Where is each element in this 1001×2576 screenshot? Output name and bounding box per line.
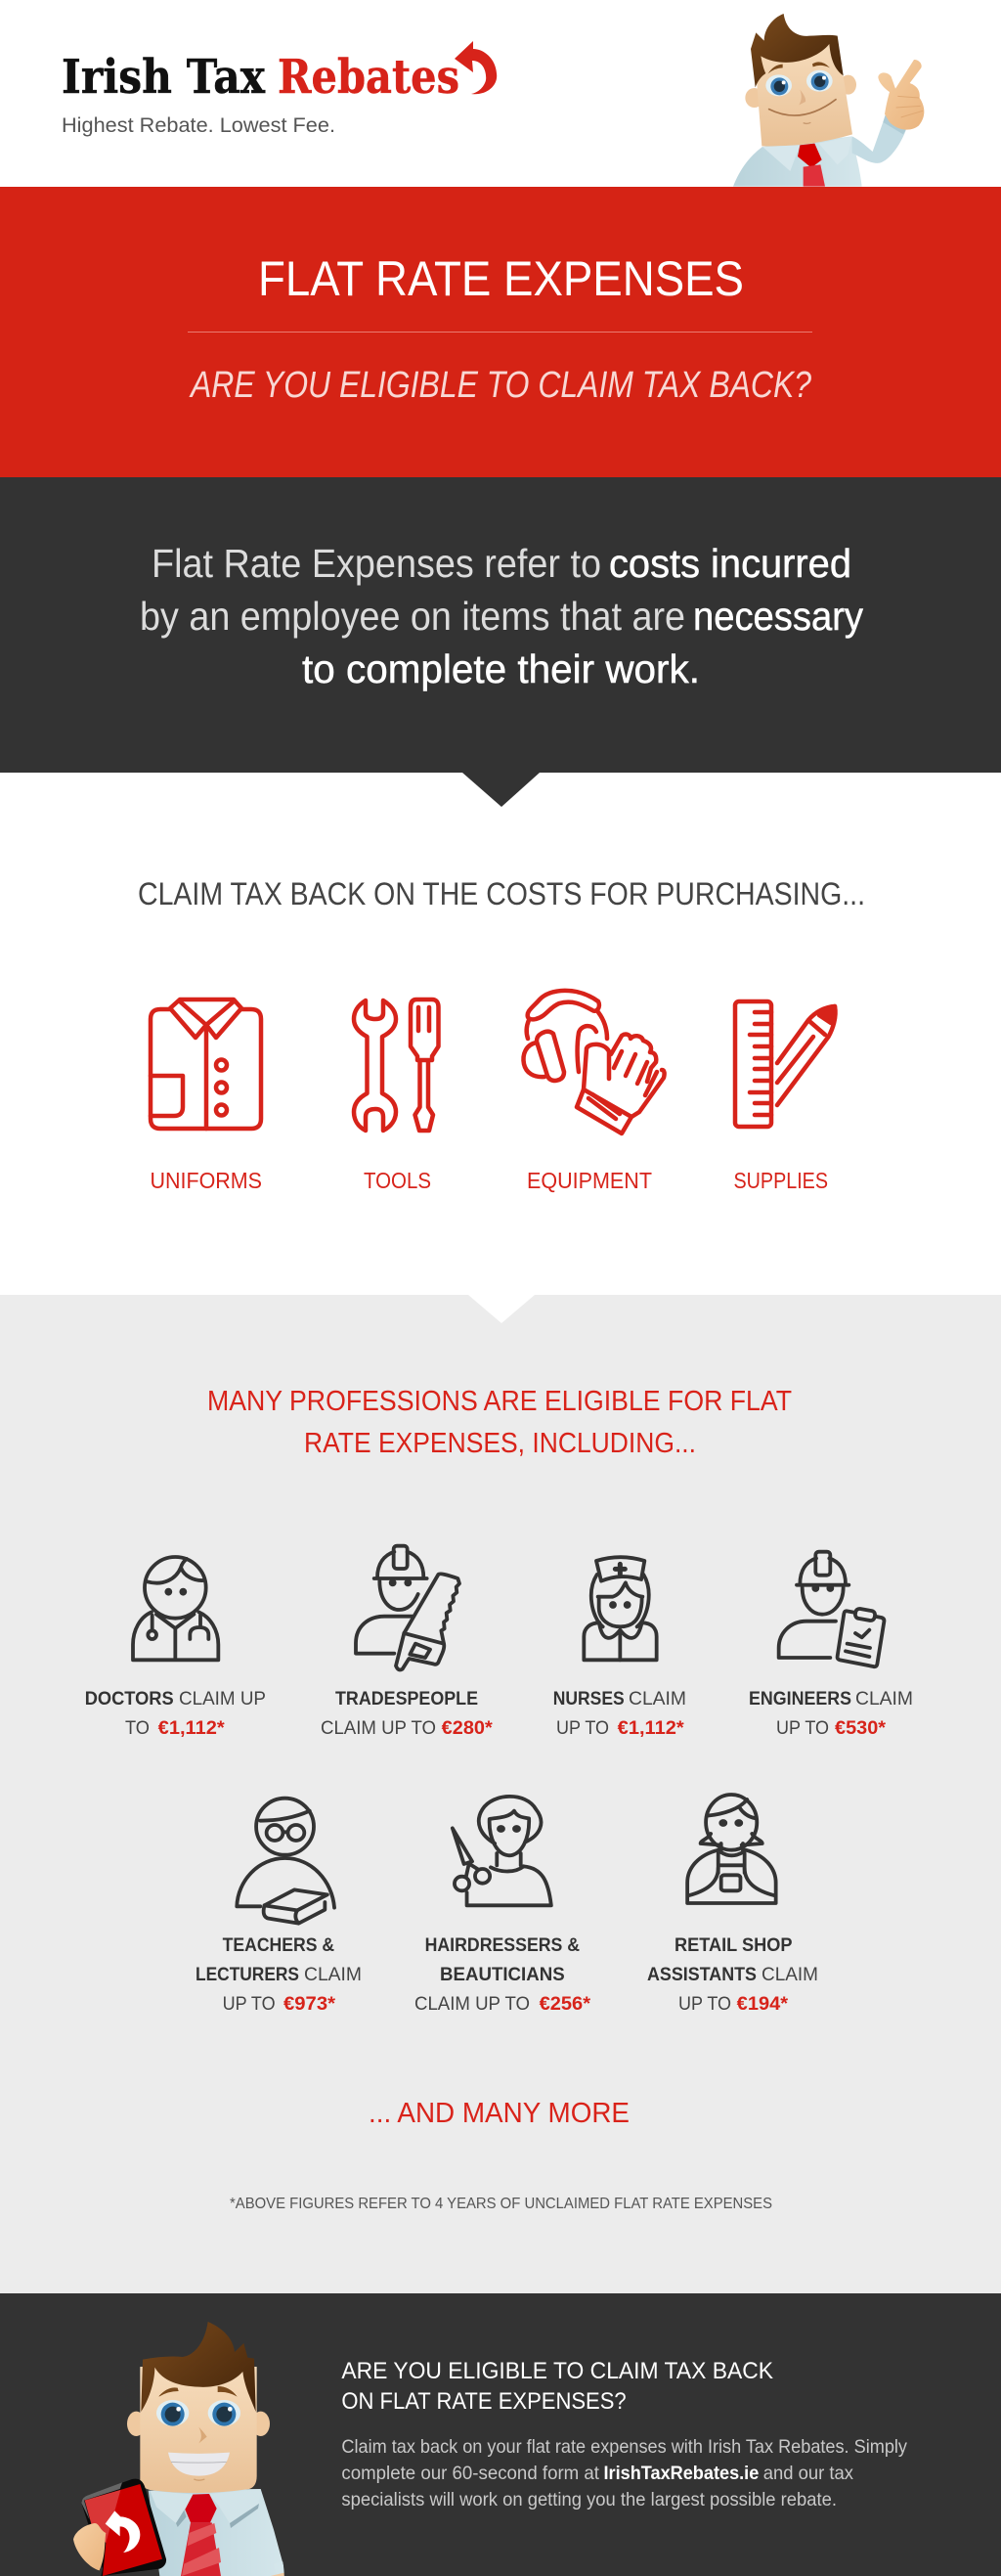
definition text [140,541,863,691]
panel: title banner [0,187,1001,477]
text: BEAUTICIANS [440,1964,565,1985]
footnote: *ABOVE FIGURES REFER TO 4 YEARS OF UNCLAIMED FLAT RATE EXPENSES [230,2196,772,2212]
tagline: Highest Rebate. Lowest Fee. [62,114,335,137]
character: pointing man [733,14,924,187]
heading [207,1386,792,1459]
text: CLAIM UP TO [321,1717,436,1739]
icon: ruler and pencil [735,1001,836,1127]
icon: engineer with clipboard [779,1552,884,1666]
profession: doctors [85,1557,266,1739]
text: CLAIM [304,1964,362,1985]
pointer arrow [462,773,540,807]
profession: nurses [553,1557,686,1739]
logo: Irish Tax [62,50,265,105]
profession: engineers [749,1552,913,1739]
heading: MANY PROFESSIONS ARE ELIGIBLE FOR FLAT [207,1386,792,1417]
heading: RATE EXPENSES, INCLUDING... [304,1428,696,1459]
icon: teacher with book [237,1799,334,1924]
text: TEACHERS & [223,1934,334,1956]
definition text: necessary [693,594,863,639]
text: €1,112* [158,1717,225,1739]
text: ENGINEERS [749,1688,851,1710]
pointer arrow [468,1295,535,1323]
label: uniforms: UNIFORMS [151,1168,262,1193]
icon: uniform shirt [151,999,261,1129]
text: CLAIM UP TO [414,1993,530,2015]
icon: wrench and screwdriver [354,999,438,1131]
text: €280* [442,1717,493,1739]
label: supplies: SUPPLIES [733,1168,828,1193]
text: DOCTORS [85,1688,174,1710]
footer body text: and our tax [763,2463,853,2484]
character: man holding phone [73,2322,284,2576]
text [647,1934,818,2015]
label: tools: TOOLS [364,1168,431,1193]
text: UP TO [776,1717,829,1739]
footer body text: Claim tax back on your flat rate expenses with Irish Tax Rebates. Simply [341,2436,907,2458]
text: UP TO [223,1993,276,2015]
text [85,1688,266,1739]
panel: header [0,0,1001,187]
text: €256* [540,1993,590,2015]
footer body text: complete our 60-second form at [341,2463,600,2484]
text [749,1688,913,1739]
text: NURSES [553,1688,625,1710]
text: CLAIM [762,1964,818,1985]
text [414,1934,590,2015]
text: UP TO [678,1993,731,2015]
icon: tradesperson with saw [356,1546,459,1669]
panel: professions [0,1295,1001,2293]
icon: nurse [584,1557,657,1660]
text [196,1934,362,2015]
heading: CLAIM TAX BACK ON THE COSTS FOR PURCHASING... [138,876,865,911]
text: CLAIM [629,1688,686,1710]
profession: retail shop assistants [647,1795,818,2015]
text [553,1688,686,1739]
panel: purchases [0,807,1001,1295]
icon: hairdresser with scissors [453,1797,551,1905]
icon: doctor [133,1557,218,1660]
profession: hairdressers and beauticians [414,1797,590,2015]
footer body text [341,2436,907,2510]
logo [62,41,497,105]
footer body text: specialists will work on getting you the largest possible rebate. [341,2489,837,2510]
text: RETAIL SHOP [675,1934,792,1956]
definition text: costs incurred [609,541,851,586]
text: CLAIM UP [179,1688,266,1710]
text: €973* [283,1993,335,2015]
icon: shop assistant [687,1795,776,1903]
footer heading [341,2358,773,2415]
text: UP TO [556,1717,609,1739]
logo: Rebates [278,50,459,105]
text: LECTURERS [196,1964,299,1985]
label: equipment: EQUIPMENT [527,1168,652,1193]
text: TO [125,1717,150,1739]
panel: definition [0,477,1001,807]
definition text: by an employee on items that are [140,594,685,639]
title: FLAT RATE EXPENSES [258,251,744,306]
text [321,1688,493,1739]
text: CLAIM [855,1688,913,1710]
subtitle: ARE YOU ELIGIBLE TO CLAIM TAX BACK? [189,365,812,406]
text: TRADESPEOPLE [335,1688,478,1710]
profession: tradespeople [321,1546,493,1739]
profession: teachers and lecturers [196,1799,362,2015]
text: €194* [737,1993,788,2015]
definition text: Flat Rate Expenses refer to [152,541,601,586]
text: €1,112* [618,1717,684,1739]
callout: and many more: ... AND MANY MORE [369,2098,630,2129]
text: €530* [835,1717,886,1739]
footer body text: IrishTaxRebates.ie [604,2463,759,2484]
footer heading: ON FLAT RATE EXPENSES? [341,2388,627,2415]
footer heading: ARE YOU ELIGIBLE TO CLAIM TAX BACK [341,2358,773,2384]
text: HAIRDRESSERS & [425,1934,580,1956]
text: ASSISTANTS [647,1964,757,1985]
definition text: to complete their work. [302,646,700,691]
panel: footer call to action [0,2293,1001,2576]
icon: ear defenders and glove [524,991,665,1133]
